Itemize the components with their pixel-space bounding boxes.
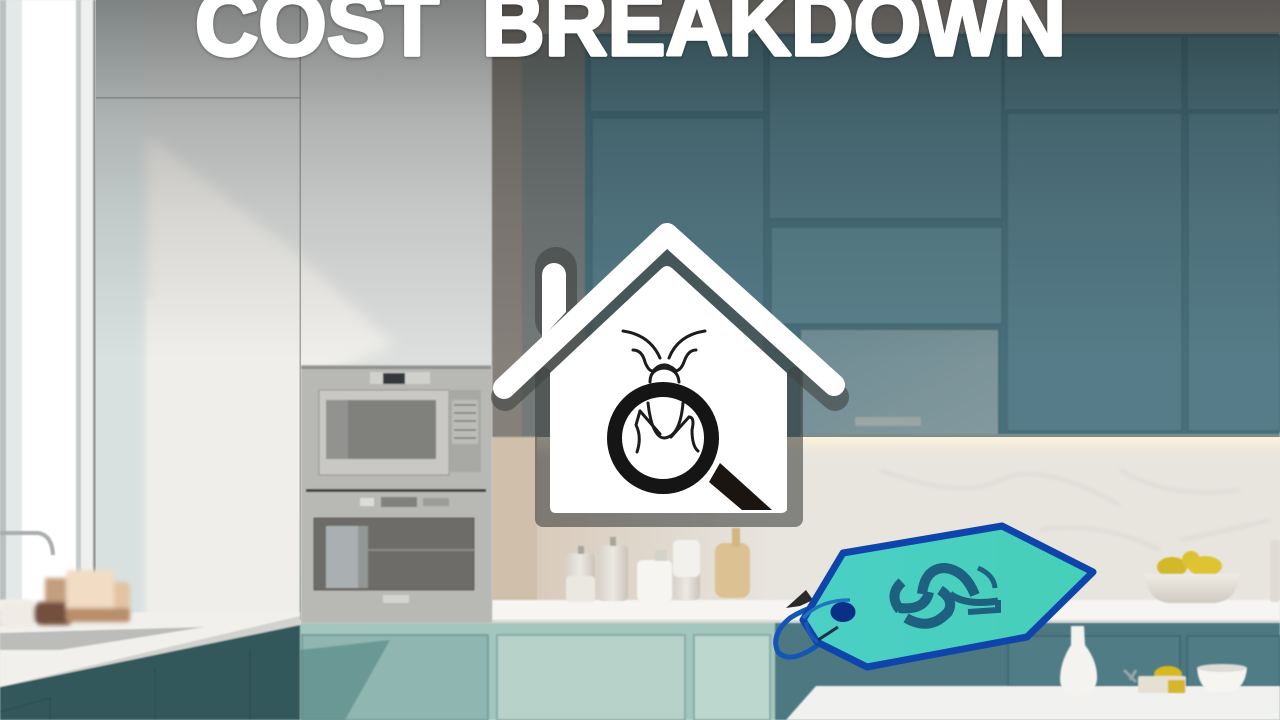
- window on the left: [0, 0, 96, 610]
- icon: price tag with logo: [776, 526, 1093, 667]
- ceiling band: [522, 0, 1280, 33]
- built-in ovens: [301, 365, 492, 623]
- white vase: [1060, 626, 1097, 696]
- tag string loop back: [776, 600, 850, 657]
- lemon bowl: [1145, 551, 1239, 603]
- magnifying glass: [614, 390, 772, 510]
- tag shadow nick: [786, 590, 813, 608]
- title: [195, 0, 1066, 75]
- canisters on counter: [566, 528, 750, 602]
- decorative jars by sink: [0, 570, 130, 627]
- plate with lemon: [1124, 666, 1186, 693]
- island counter: [786, 686, 1280, 720]
- dark side panel: [492, 0, 590, 607]
- house body: [550, 266, 787, 513]
- tag body: [803, 526, 1093, 667]
- house roof and chimney: [504, 234, 834, 388]
- left countertop with sink: [0, 533, 300, 720]
- countertop: [492, 600, 1280, 623]
- upper teal cabinets: [585, 33, 1280, 438]
- bottle at far right: [1270, 540, 1280, 602]
- string knot: [818, 627, 838, 640]
- white cup: [1197, 664, 1247, 692]
- house shadow outline: [505, 250, 835, 519]
- tag string lower: [806, 622, 818, 642]
- tag hole: [830, 602, 856, 622]
- marble backsplash: [537, 437, 1280, 603]
- lower cabinets: [300, 623, 1280, 720]
- tag string front: [803, 600, 850, 618]
- logo swirl: [894, 568, 998, 624]
- top shading behind title: [96, 0, 1280, 360]
- bug: [623, 331, 705, 452]
- icon: house with bug under magnifying glass: [504, 234, 835, 519]
- left wall and tall cabinet with sunlight: [96, 0, 493, 620]
